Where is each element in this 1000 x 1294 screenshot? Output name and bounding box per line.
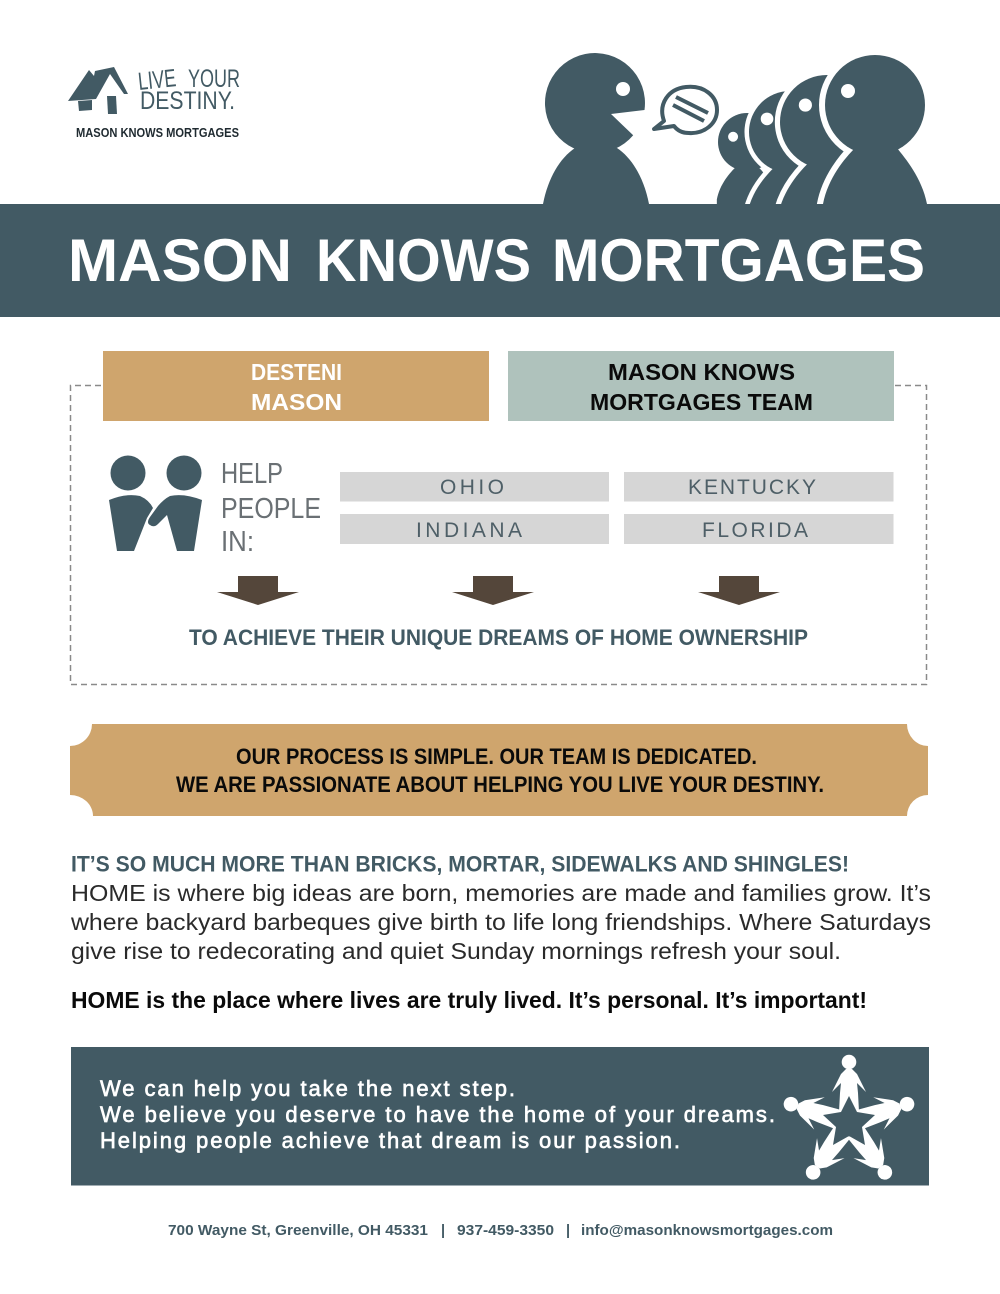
text: help people in: PEOPLE [221, 493, 321, 525]
logo wordmark: YOUR [188, 65, 240, 93]
title banner: MASON [68, 227, 292, 294]
text: call to action: We can help you take the next step. [100, 1076, 515, 1101]
person 1 [821, 55, 927, 215]
person 4 [717, 113, 777, 212]
footer: contact details: | [441, 1223, 445, 1239]
header: Mason Knows Mortgages Team: MASON KNOWS [608, 359, 795, 385]
icon: speaking person [543, 53, 649, 204]
state: Indiana [340, 514, 609, 544]
state: Ohio [340, 472, 609, 502]
logo: Live Your Destiny [68, 64, 240, 140]
plaque: process statement [70, 724, 928, 816]
text block: home description [70, 852, 931, 1013]
logo wordmark: DESTINY. [140, 87, 235, 115]
logo tagline: MASON KNOWS MORTGAGES [76, 126, 239, 140]
title banner: MORTGAGES [552, 227, 925, 294]
text: call to action: Helping people achieve that dream is our passion. [100, 1128, 680, 1153]
title banner: KNOWS [316, 227, 531, 294]
state: Ohio: OHIO [440, 476, 504, 499]
logo wordmark: LIVE [137, 64, 177, 96]
plaque: process statement: WE ARE PASSIONATE ABOUT HELPING YOU LIVE YOUR DESTINY. [176, 772, 824, 797]
icon: listening people [717, 55, 927, 235]
title banner [0, 204, 1000, 317]
plaque: process statement: OUR PROCESS IS SIMPLE. OUR TEAM IS DEDICATED. [236, 744, 757, 769]
header: Desteni Mason [103, 351, 489, 421]
header: Desteni Mason: MASON [251, 389, 342, 415]
arrow: middle [452, 576, 534, 605]
bold statement: HOME is the place where lives are truly lived. It’s personal. It’s important! [71, 987, 867, 1013]
subheading: IT’S SO MUCH MORE THAN BRICKS, MORTAR, SIDEWALKS AND SHINGLES! [71, 852, 849, 876]
illustration: speaker and listening crowd [543, 53, 927, 235]
body paragraph [70, 880, 931, 964]
header: Mason Knows Mortgages Team: MORTGAGES TEAM [590, 389, 813, 415]
logo wordmark [137, 64, 240, 115]
arrow: left [217, 576, 299, 605]
icon: house [68, 67, 128, 114]
text: dreams statement: TO ACHIEVE THEIR UNIQUE DREAMS OF HOME OWNERSHIP [189, 625, 808, 650]
text: help people in [221, 458, 321, 558]
text: help people in: IN: [221, 526, 254, 558]
footer: contact details [168, 1223, 833, 1239]
state: Kentucky: KENTUCKY [688, 476, 816, 499]
dashed panel: who we help [70, 351, 926, 684]
state: Florida [624, 514, 894, 544]
footer: contact details: | [566, 1223, 570, 1239]
body paragraph: where backyard barbeques give birth to life long friendships. Where Saturdays [70, 909, 931, 935]
arrow: right [698, 576, 780, 605]
icon: two people [109, 456, 202, 551]
footer: contact details: 937-459-3350 [457, 1223, 554, 1239]
footer: contact details: info@masonknowsmortgages.com [581, 1223, 833, 1239]
icon: speech bubble [654, 87, 717, 133]
header: Desteni Mason: DESTENI [251, 359, 342, 385]
person 2 [774, 75, 876, 235]
footer: contact details: 700 Wayne St, Greenville, OH 45331 [168, 1223, 428, 1239]
text: call to action: We believe you deserve to have the home of your dreams. [100, 1102, 775, 1127]
icon: circle of people around star [779, 1055, 919, 1188]
state: Indiana: INDIANA [416, 519, 522, 542]
state: Kentucky [624, 472, 894, 502]
body paragraph: HOME is where big ideas are born, memories are made and families grow. It’s [71, 880, 931, 906]
text: call to action [100, 1076, 775, 1153]
panel: call to action [71, 1047, 929, 1188]
text: help people in: HELP [221, 458, 283, 490]
person 3 [744, 91, 833, 230]
body paragraph: give rise to redecorating and quiet Sunday mornings refresh your soul. [71, 938, 841, 964]
state: Florida: FLORIDA [702, 519, 808, 542]
header: Mason Knows Mortgages Team [508, 351, 894, 421]
